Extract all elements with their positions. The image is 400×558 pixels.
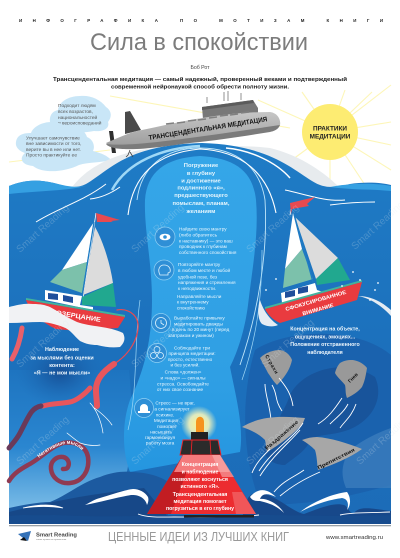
watermarks: Smart Reading [260,317,317,370]
column tip: repeat: к внутреннему [177,300,209,304]
cloud: lower note: Улучшает самочувствие [26,136,80,142]
column tip: repeat: Направляйте мысли [177,293,222,299]
column tip: habit: завтраком и ужином) [168,333,214,338]
lower waves [9,472,171,524]
column tip: principle: стресса. Освобождайте [157,380,209,386]
column tip: stress: психике. [156,412,174,418]
buoy text: Трансцендентальная [173,492,227,498]
watermarks [15,199,400,467]
obstacles: rocks [260,350,367,428]
sun: practices of meditation: ПРАКТИКИ [313,126,347,132]
text: observation: Наблюдение [45,346,79,353]
right sailboat [258,197,391,326]
white foam [9,304,124,347]
foam spray behind wave [70,146,340,190]
buoy text: и наблюдение [182,468,218,476]
shark fins: Препятствия [317,447,356,471]
flag [290,197,315,214]
fear rock [260,350,292,385]
submarine [106,91,280,157]
column tip: mantra: проводник к глубинам [179,244,227,249]
column tip: stress: насыщать [150,430,172,434]
cloud: top note: и вероисповеданий [58,120,102,126]
icon: alarm [134,398,154,418]
watermarks: Smart Reading [130,202,187,255]
shark fins: Раздражение [264,419,300,452]
submarine label: ТРАНСЦЕНДЕНТАЛЬНАЯ МЕДИТАЦИЯ [148,116,268,142]
anchor [126,150,133,157]
text: concentration: Концентрация на объекте, [290,326,360,332]
text: observation: «Я — не мои мысли» [34,370,90,376]
footer slogan: ЦЕННЫЕ ИДЕИ ИЗ ЛУЧШИХ КНИГ [108,530,289,544]
column tip: principle: просто, естественно [168,357,213,362]
column tip: stress: а сигнализирует [154,406,191,412]
sea background [9,143,391,524]
cloud: top note: Подходит людям [58,103,96,109]
column tip: stress: помогает [157,424,178,429]
icon: three circles [148,344,166,362]
column tip: habit: в день по 20 минут (перед [172,327,229,332]
central column of knowledge [36,146,375,472]
buoy text: Концентрация [182,462,218,468]
white foam [258,296,391,326]
boat label: focused attention: СФОКУСИРОВАННОЕ [285,290,348,313]
footer logo: самое лучшее из лучших книг [36,539,67,541]
column tip: stress: работу мозга [146,440,175,446]
buoy text: медитация помогает [173,499,227,505]
icon: head [154,260,174,280]
footer logo [18,531,77,541]
watermarks: Smart Reading [245,202,302,255]
text: observation: контента: [49,363,75,369]
column tip: principle: Соблюдайте три [174,344,210,350]
dark circle behind observation text [16,336,104,408]
cloud: lower note [16,122,111,171]
column heading: в глубину [187,170,216,177]
icon: clock [152,314,170,332]
anger rock [335,360,367,398]
column tip: habit: Выработайте привычку [174,314,225,320]
column heading: подлинного «я», [177,186,225,192]
obstacles: rocks: Гнев [347,372,360,384]
column heading: помыслам, планам, [173,201,230,207]
intro text [53,76,347,90]
text: concentration: ощущениях, эмоциях... [295,334,356,340]
column tip: repeat: к неподвижности. [178,286,216,291]
column heading: Погружение [184,163,219,169]
lower-left light water [9,370,132,524]
text: concentration: наблюдателя [307,349,343,356]
column tip: principle: Слова «должен» [165,370,202,374]
eyebrow line: ИНФОГРАФИКА ПО МОТИЗАМ КНИГИ [19,18,383,23]
sun: practices of meditation: МЕДИТАЦИИ [310,134,351,140]
author: Боб Рот [190,65,210,71]
text: concentration: Положение отстраненного [290,342,360,348]
cloud: lower note: Просто практикуйте ее [26,152,77,158]
boat cabin [281,283,323,303]
boat label: contemplation: СОЗЕРЦАНИЕ [51,309,102,324]
label: negative thoughts: Негативные мысли [37,441,84,458]
cloud: top note: национальностей [58,114,98,121]
footer logo: Smart Reading [36,532,77,538]
cloud: top note [50,96,111,132]
watermarks: Smart Reading [130,317,187,370]
shark fins [242,417,362,496]
watermarks: Smart Reading [15,414,72,467]
column tip: mantra: к наставнику) — это ваш [179,238,233,244]
left sailboat [9,213,125,347]
boat label: focused attention: ВНИМАНИЕ [302,303,335,317]
column tip: principle: от них свое сознание [157,387,203,392]
cloud: top note: всех возрастов, [58,110,93,115]
light surface band [9,181,391,194]
column tip: principle: и «надо» — сигналы [161,376,206,380]
text: observation: за мыслями без оценки [30,354,94,362]
watermarks: Smart Reading [15,317,72,370]
buoy text: истинного «Я». [181,484,220,490]
column tip: repeat: удобной позе, без [178,274,217,280]
title: Сила в спокойствии [90,29,308,56]
column tip: stress: Стресс — не враг, [155,400,195,406]
column tip: repeat: напряжения и стремления [178,280,236,285]
footer url: www.smartreading.ru [326,535,383,541]
column heading: желаниям [186,209,215,215]
deep water swirl right [245,334,391,505]
column tip: repeat: Повторяйте мантру [178,261,221,267]
column tip: habit: медитировать дважды [174,322,224,326]
cloud: lower note: вне зависимости от того, [26,142,82,147]
column heading: и достижение [181,178,222,184]
lighthouse buoy [147,406,256,514]
column tip: stress: гармонизируя [145,435,175,440]
watermarks: Smart Reading [15,202,72,255]
watermarks: Smart Reading [245,414,302,467]
obstacles: rocks: Страхи [263,354,279,375]
column tip: repeat: спокойствию [177,304,205,310]
footer rule [9,525,391,526]
column tip: repeat: в любом месте и любой [178,267,231,273]
column tip: principle: и без усилий. [170,362,200,368]
boat cabin [45,290,93,310]
buoy text: погрузиться в его глубину [166,505,234,512]
tentacles [9,310,138,483]
flag [96,213,120,222]
sun rays background [9,85,391,185]
bottom water [9,515,391,524]
watermarks: Smart Reading [130,414,187,467]
sun: practices of meditation [302,104,358,160]
cloud: lower note: верите вы в нее или нет. [26,148,81,153]
column tip: principle: принципа медитации: [168,351,216,356]
column tip: stress: Медитация [154,418,179,423]
buoy text: позволяют коснуться [172,477,228,483]
icon: eye [155,227,175,247]
intro text: современной нейронаукой способ обрести полноту жизни. [111,84,289,90]
column heading: предшествующего [174,193,228,199]
column tip: mantra: (либо обратитесь [179,232,218,238]
column tip: mantra: Найдите свою мантру [179,226,227,232]
column tip: mantra: собственного спокойствия [179,249,237,255]
intro text: Трансцендентальная медитация — самый надежный, проверенный веками и подтвержденный [53,76,347,83]
